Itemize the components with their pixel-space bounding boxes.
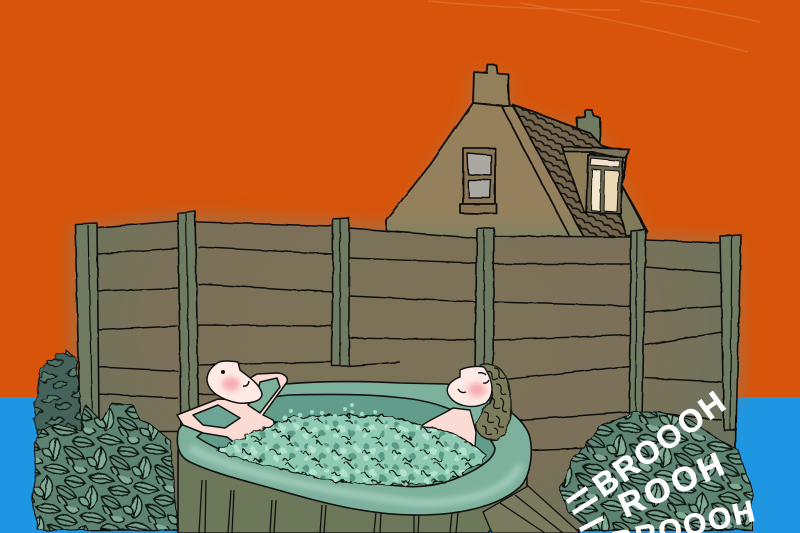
fence panels [90, 221, 736, 530]
body [420, 408, 476, 450]
tub staves [178, 450, 527, 533]
left arm gap [193, 405, 240, 428]
engine sound text: BROOOH [567, 383, 760, 533]
dormer right roof [620, 187, 647, 236]
closed eyes and smile [458, 373, 489, 393]
man on left [177, 361, 287, 447]
orange sky [0, 0, 800, 398]
loose bubbles [278, 403, 377, 427]
foam bubbles in tub [217, 403, 487, 485]
tub rim [177, 382, 531, 515]
fence posts [75, 211, 741, 440]
woman on right [420, 364, 511, 450]
right arm gap [248, 378, 280, 413]
cheek [468, 383, 486, 397]
roof edge line [502, 107, 570, 237]
wispy cloud streaks [428, 1, 760, 52]
deck steps [483, 486, 580, 533]
front chimney [473, 65, 509, 106]
dormer roof [562, 147, 629, 158]
dark bush at left [34, 350, 84, 500]
eye and smile [221, 370, 225, 374]
dormer wall [563, 150, 590, 212]
gable wall [386, 103, 590, 240]
glow behind house and fence [70, 74, 744, 400]
blue lower background [0, 397, 800, 533]
water inside tub [197, 394, 495, 487]
hot tub [177, 382, 531, 533]
sound line 2: ROOH [613, 444, 732, 525]
rear chimney [577, 110, 600, 145]
house [386, 65, 648, 240]
pale rim highlight [190, 448, 520, 503]
hair [476, 364, 511, 440]
horizontal slat lines [98, 247, 722, 450]
foam mass [217, 415, 487, 485]
gable window [463, 148, 495, 204]
front bush at right [560, 412, 752, 530]
head [207, 361, 262, 403]
wooden fence [75, 211, 741, 530]
sound line 1: BROOOH [586, 383, 733, 504]
cheek [222, 377, 240, 391]
body and arms [177, 373, 287, 447]
front bush at left [32, 403, 178, 530]
head [447, 366, 492, 406]
roof tiles [512, 104, 648, 237]
speed dashes [567, 488, 603, 530]
dormer window [586, 155, 623, 214]
